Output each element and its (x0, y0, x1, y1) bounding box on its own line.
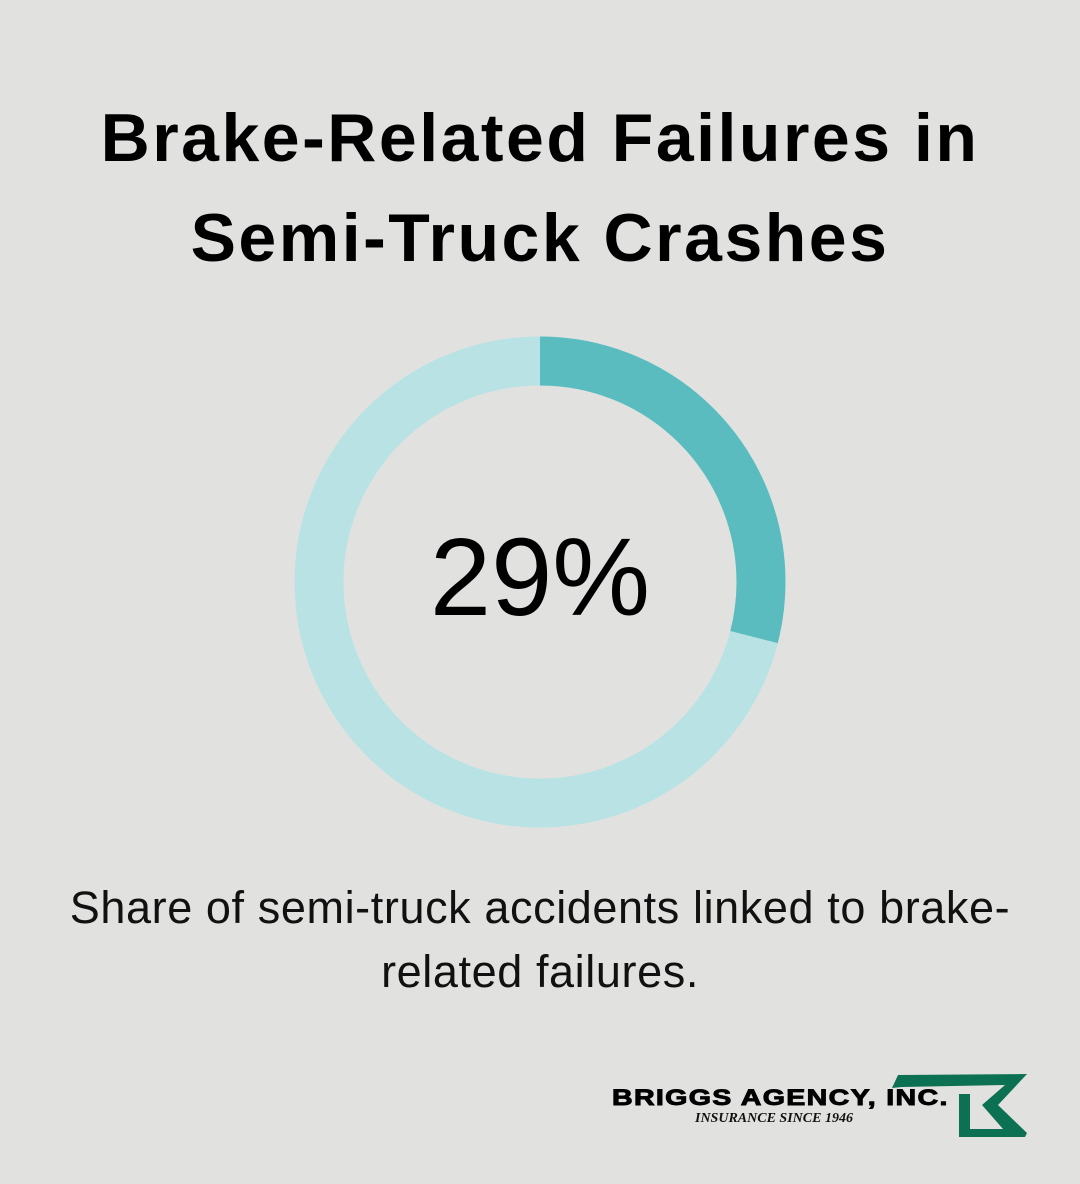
logo: INSURANCE SINCE 1946 (695, 1111, 853, 1126)
caption (70, 882, 1010, 997)
caption: related failures. (381, 946, 699, 997)
title: Semi-Truck Crashes (191, 200, 889, 276)
donut chart: 29% (430, 516, 650, 639)
logo: BRIGGS AGENCY, INC. (612, 1085, 949, 1110)
title: Brake-Related Failures in (101, 100, 979, 176)
caption: Share of semi-truck accidents linked to brake- (70, 882, 1010, 933)
title (101, 100, 979, 276)
logo (612, 1074, 1027, 1137)
